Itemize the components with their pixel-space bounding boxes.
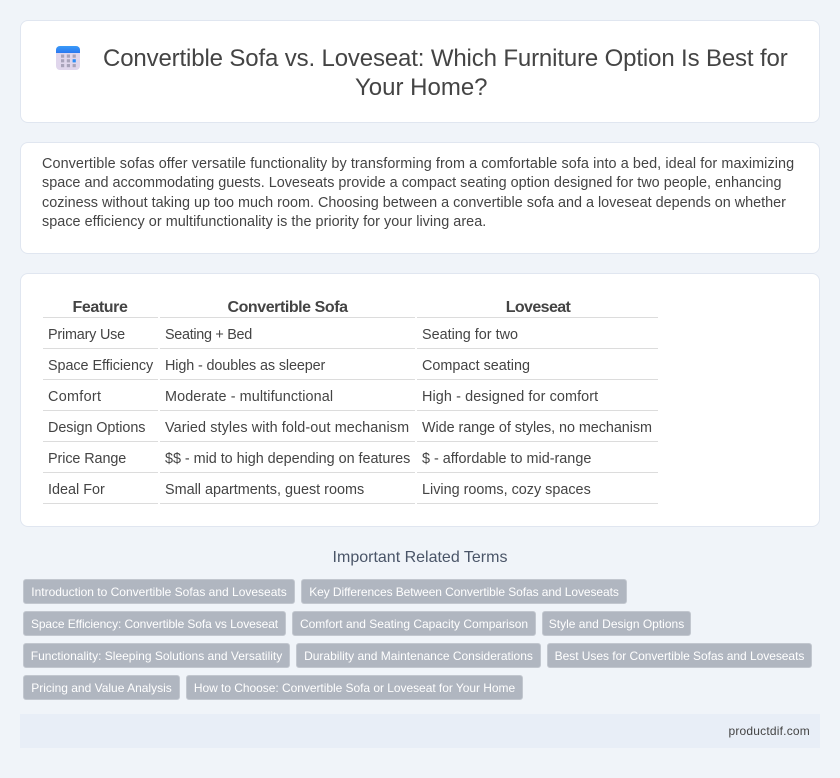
tag list: related terms: Style and Design Options (549, 617, 684, 631)
icon: calendar (56, 46, 80, 70)
tag list: related terms: Introduction to Convertible Sofas and Loveseats (31, 585, 287, 599)
comparison table: Ideal For (48, 482, 105, 498)
tag list: related terms: Best Uses for Convertible Sofas and Loveseats (555, 649, 804, 663)
title (103, 45, 788, 101)
comparison table: High - designed for comfort (422, 389, 598, 405)
text block: introduction: coziness without taking up too much room. Choosing between a convertible sofa and a loveseat depends on whether (42, 195, 786, 211)
panel: title card (20, 20, 820, 123)
tag list: related terms: Pricing and Value Analysis (31, 681, 172, 695)
footer bar (20, 714, 820, 748)
comparison table: Comfort (48, 389, 101, 405)
tag list: related terms: How to Choose: Convertible Sofa or Loveseat for Your Home (194, 681, 515, 695)
comparison table: Small apartments, guest rooms (165, 482, 364, 498)
text block: introduction: space and accommodating guests. Loveseats provide a compact seating option designed for two people, enhancing (42, 175, 782, 191)
comparison table: Convertible Sofa (227, 299, 348, 316)
comparison table: Design Options (48, 420, 145, 436)
comparison table: Price Range (48, 451, 126, 467)
comparison table: Loveseat (506, 299, 570, 316)
comparison table (43, 299, 658, 504)
comparison table: Compact seating (422, 358, 530, 374)
panel: introduction (20, 142, 820, 254)
comparison table: Seating for two (422, 327, 518, 343)
text block: introduction: space efficiency or multifunctionality is the priority for your living area. (42, 214, 486, 230)
tag list: related terms: Comfort and Seating Capacity Comparison (300, 617, 528, 631)
comparison table: $$ - mid to high depending on features (165, 451, 410, 467)
comparison table: High - doubles as sleeper (165, 358, 325, 374)
comparison table: Varied styles with fold-out mechanism (165, 420, 409, 436)
title: Convertible Sofa vs. Loveseat: Which Furniture Option Is Best for (103, 45, 788, 72)
tag list: related terms: Durability and Maintenance Considerations (304, 649, 533, 663)
comparison table: Primary Use (48, 327, 125, 343)
panel: comparison table (20, 273, 820, 527)
comparison table: Seating + Bed (165, 327, 252, 343)
text block: introduction: Convertible sofas offer versatile functionality by transforming from a comfortable sofa into a bed, ideal for maximizing (42, 156, 794, 172)
tag list: related terms: Functionality: Sleeping Solutions and Versatility (31, 649, 282, 663)
comparison table: Space Efficiency (48, 358, 153, 374)
tag list: related terms: Space Efficiency: Convertible Sofa vs Loveseat (31, 617, 278, 631)
title: Your Home? (355, 74, 488, 101)
comparison table: Living rooms, cozy spaces (422, 482, 591, 498)
text block: introduction (42, 156, 794, 230)
comparison table: $ - affordable to mid-range (422, 451, 591, 467)
comparison table: Feature (72, 299, 128, 316)
footer text: productdif.com (728, 724, 810, 738)
comparison table: Moderate - multifunctional (165, 389, 333, 405)
tag list: related terms: Key Differences Between Convertible Sofas and Loveseats (309, 585, 619, 599)
comparison table: Wide range of styles, no mechanism (422, 420, 652, 436)
heading: related terms: Important Related Terms (333, 549, 507, 566)
tag list: related terms (23, 579, 812, 700)
